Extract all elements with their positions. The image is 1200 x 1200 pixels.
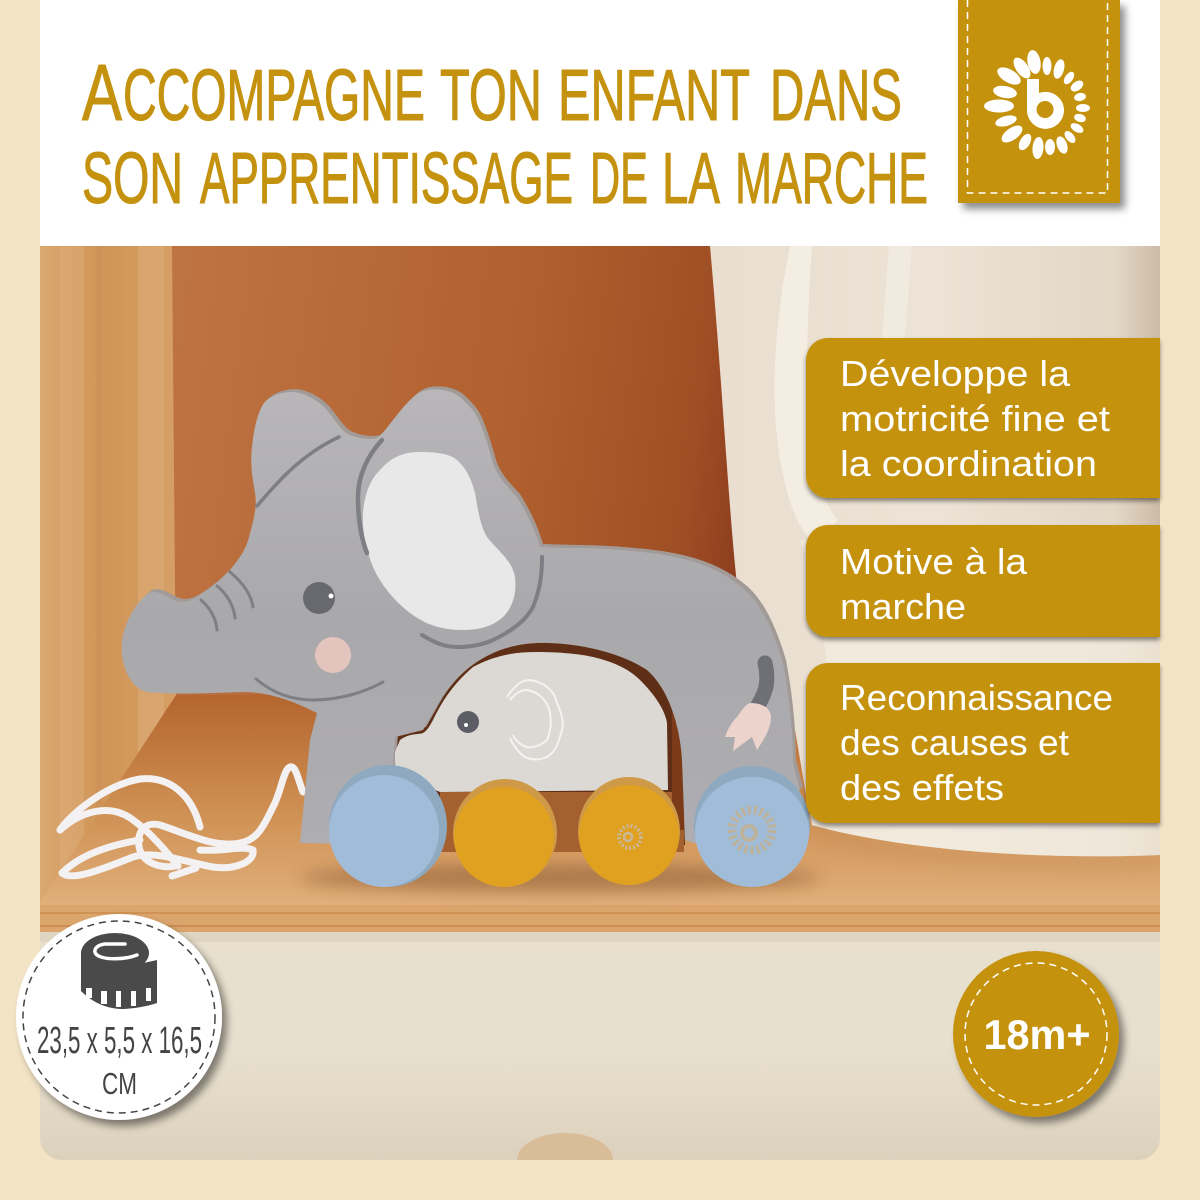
shelf side wall: [40, 246, 180, 906]
wheel: yellow left: [453, 779, 557, 887]
benefit pill: fine motor skills: la coordination: [840, 443, 1097, 484]
elephant top edge: [144, 386, 803, 789]
elephant line details: [201, 437, 542, 700]
title: MARCHE: [735, 139, 928, 219]
icon: sunflower logo: [984, 49, 1090, 159]
baby elephant: [395, 652, 668, 792]
eye: [303, 582, 335, 614]
wheel: rear right: [694, 766, 810, 887]
elephant body: [122, 389, 800, 845]
product photo: [40, 246, 1160, 1187]
wheel: yellow right: [578, 777, 680, 885]
logo tag: [958, 0, 1120, 203]
bag strap: [774, 246, 838, 545]
size text: CM: [102, 1066, 137, 1101]
size text: 23,5 x 5,5 x 16,5: [37, 1020, 202, 1062]
benefit pill: cause and effect: des causes et: [840, 722, 1069, 763]
title: ENFANT: [558, 56, 750, 136]
shelf back wall: [170, 246, 770, 706]
benefit pill: fine motor skills: motricité fine et: [840, 398, 1110, 439]
title: SON: [82, 139, 183, 219]
icon: measuring tape: [81, 933, 157, 1009]
benefit pill: walking: Motive à la: [840, 541, 1028, 582]
benefit pill: walking: marche: [840, 586, 966, 627]
wheel: rear left: [329, 765, 447, 887]
string: [60, 767, 303, 876]
arch shadow: [393, 643, 685, 845]
age badge: [953, 951, 1119, 1117]
cheek: [315, 637, 351, 673]
shelf front edge: [40, 905, 1160, 932]
benefit pill: cause and effect: des effets: [840, 767, 1004, 808]
tail: [725, 663, 771, 751]
title: CCOMPAGNE: [123, 56, 425, 136]
benefit pill: fine motor skills: Développe la: [840, 353, 1071, 394]
title: TON: [440, 56, 542, 136]
age badge: 18m+: [984, 1011, 1090, 1058]
title: [82, 48, 928, 219]
drawer knob: [517, 1133, 613, 1160]
inner ear: [363, 452, 515, 630]
toy shadow: [300, 864, 820, 892]
header band: [40, 0, 1160, 246]
benefit pill: cause and effect: [806, 663, 1160, 823]
size badge: [16, 914, 222, 1120]
shelf floor: [40, 695, 1160, 907]
title: DE: [590, 139, 648, 219]
title: LA: [662, 139, 720, 219]
toy: [122, 386, 810, 887]
title: A: [82, 48, 122, 137]
benefit pill: fine motor skills: [806, 338, 1160, 498]
drawer front: [40, 932, 1160, 1160]
benefit pill: cause and effect: Reconnaissance: [840, 677, 1113, 718]
title: APPRENTISSAGE: [200, 139, 573, 219]
benefit pill: walking: [806, 525, 1160, 637]
size text: [37, 1020, 202, 1101]
title: DANS: [770, 56, 902, 136]
cloth bag: [710, 246, 1160, 864]
